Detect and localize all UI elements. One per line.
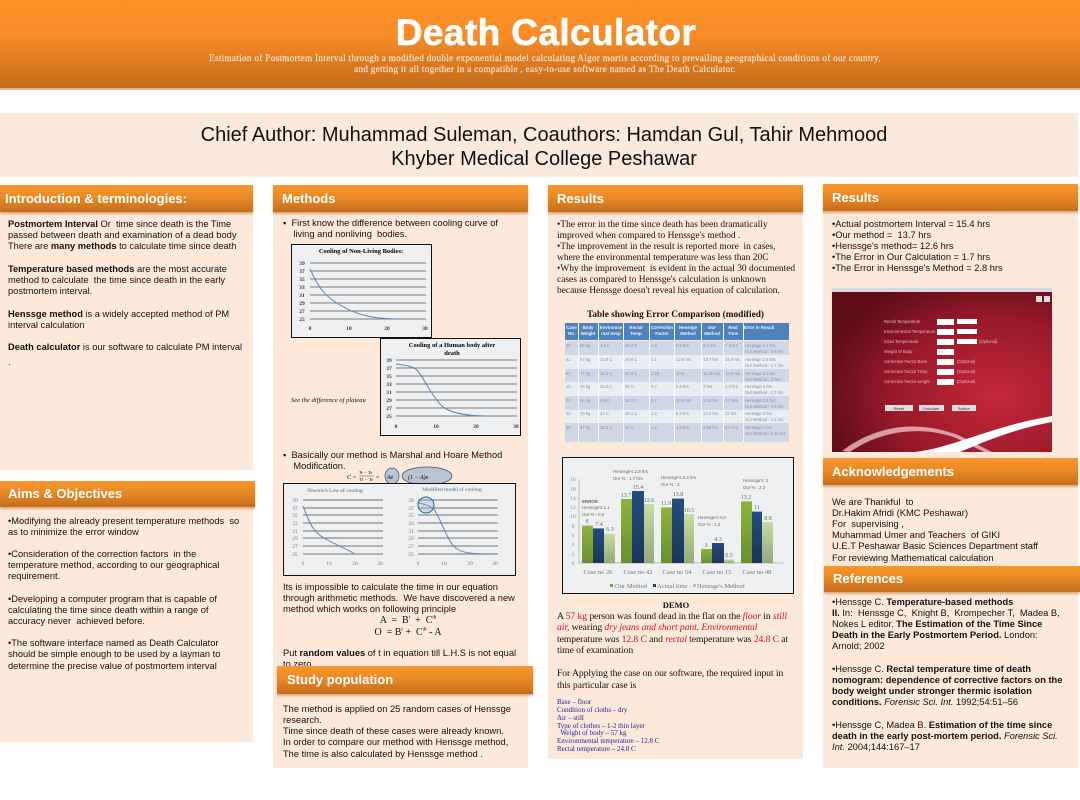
- error comparison table: 26: [566, 343, 571, 348]
- equation: [347, 466, 452, 483]
- bar chart: case comparison: 12.6: [644, 498, 654, 504]
- bar chart: case comparison: Henssge's:2.8 hrs: [613, 469, 649, 474]
- chart: cooling of a human body after death: 20: [473, 424, 479, 430]
- error comparison table: Henssge:3.3 hrs: [745, 371, 776, 376]
- bar chart: case comparison: 11.9: [661, 501, 671, 507]
- error comparison table: 15.4 hrs: [725, 357, 740, 362]
- bar chart: case comparison: 8.8: [764, 516, 772, 522]
- chart: cooling of a human body after death: [380, 338, 521, 436]
- error comparison table: 13.3 C: [600, 425, 612, 430]
- error comparison table: Factor: [655, 331, 669, 336]
- error comparison table: 54: [566, 371, 571, 376]
- bar chart: case comparison: 0: [572, 561, 575, 567]
- chart pair: Newton's law and modified model: 20: [467, 561, 473, 567]
- chart: cooling of a human body after death: 0: [395, 424, 398, 430]
- error comparison table: 7.4 hrs: [725, 343, 738, 348]
- chart: cooling of a human body after death: 33: [386, 382, 392, 388]
- chart pair: Newton's law and modified model: 20: [352, 561, 358, 567]
- chart: cooling of a human body after death: 31: [386, 390, 392, 396]
- software screenshot: (Optional): [957, 359, 976, 364]
- bar chart: case comparison: Henssge's:3.3 hrs: [661, 475, 697, 480]
- chart pair: Newton's law and modified model: 31: [408, 529, 414, 535]
- heading: results: [548, 185, 803, 212]
- error comparison table: Method: [680, 331, 696, 336]
- error comparison table: Henssge:2 hrs: [745, 411, 772, 416]
- bar chart: case comparison: Actual time: [657, 583, 688, 590]
- error comparison table: Correction: [651, 325, 673, 330]
- authors text: [201, 124, 887, 170]
- error comparison table: ntal temp: [601, 331, 621, 336]
- error comparison table: 10.5: [676, 371, 685, 376]
- heading: results: [823, 184, 1078, 211]
- software screenshot: Calculate: [923, 406, 940, 411]
- chart: cooling of non-living bodies: 25: [299, 317, 305, 323]
- error comparison table: 30.6 C: [625, 371, 637, 376]
- bar chart: case comparison: 10.5: [684, 508, 694, 514]
- chart: cooling of non-living bodies: 35: [299, 277, 305, 283]
- chart: cooling of non-living bodies: 29: [299, 301, 305, 307]
- bar chart: case comparison: Our % : 2: [661, 482, 680, 487]
- error comparison table: Case: [566, 325, 577, 330]
- error comparison table: 1.0: [651, 343, 657, 348]
- bar chart: case comparison: Case no 48: [743, 569, 771, 576]
- equation: Tr − Te: [359, 470, 372, 475]
- error comparison table: Environme: [600, 325, 623, 330]
- chart: cooling of non-living bodies: [291, 244, 432, 338]
- chart: cooling of a human body after death: 10: [433, 424, 439, 430]
- bar chart: case comparison: 16: [570, 486, 576, 492]
- error comparison table: 10.0 hrs: [676, 398, 691, 403]
- chart: cooling of a human body after death: 35: [386, 374, 392, 380]
- error comparison table: 12.6 hrs: [676, 357, 691, 362]
- bar chart: case comparison: 8: [572, 524, 575, 530]
- chart: cooling of a human body after death: 37: [386, 366, 392, 372]
- chart pair: Newton's law and modified model: 29: [292, 536, 298, 542]
- error comparison table: Henssge:1 hrs: [745, 425, 772, 430]
- chart: cooling of non-living bodies: 31: [299, 293, 305, 299]
- software screenshot: Correction Factor Base: [884, 359, 928, 364]
- bar chart: case comparison: 2: [572, 552, 575, 558]
- chart: cooling of a human body after death: 29: [386, 398, 392, 404]
- error comparison table: 1.2: [651, 411, 657, 416]
- bar chart: case comparison: 6.3: [606, 527, 614, 533]
- heading: study population: [277, 666, 533, 694]
- aims text: •Modifying the already present temperature methods so as to minimize the error window •Consideration of the correction factors in the temperature method, according to our geographical requirement. •Developing a computer program that is capable of calculating the time since death within a range of accuracy never achieved before. •The software interface named as Death Calculator should be simple enough to be used by a layman to determine the precise value of postmortem interval: [8, 516, 239, 671]
- panel: references: [823, 566, 1078, 768]
- chart: cooling of non-living bodies: 30: [422, 326, 428, 332]
- demo title: DEMO: [663, 600, 689, 610]
- chart pair: Newton's law and modified model: 27: [408, 544, 414, 550]
- chart: cooling of a human body after death: 30: [513, 424, 519, 430]
- software screenshot: (Optional): [979, 339, 998, 344]
- bar chart: case comparison: Case no 54: [663, 569, 692, 576]
- error comparison table: 11.8 C: [600, 384, 612, 389]
- bar chart: case comparison: Our % : 1.3: [698, 522, 721, 527]
- heading: aims: [0, 481, 255, 507]
- error comparison table: 22: [566, 398, 571, 403]
- bar chart: case comparison: 4: [572, 542, 575, 548]
- heading: results: Results: [557, 191, 604, 206]
- panel: results left: [548, 185, 803, 759]
- software screenshot: Weight of Body: [884, 349, 913, 354]
- chart pair: Newton's law and modified model: 0: [302, 561, 305, 567]
- chart: cooling of non-living bodies: 37: [299, 269, 305, 275]
- error comparison table: Henssge: [679, 325, 698, 330]
- software screenshot: Correction Factor TDay: [884, 369, 928, 374]
- bar chart: case comparison: Our % : 1.7 hrs: [613, 476, 643, 481]
- panel: results right: [823, 184, 1078, 458]
- heading: study population: Study population: [287, 672, 393, 687]
- chart: cooling of non-living bodies: 27: [299, 309, 305, 315]
- bar chart: case comparison: Henssge's: 2: [743, 478, 769, 483]
- demo narrative: A 57 kg person was found dead in the flat on the floor in still air, wearing dry jeans and short pant. Environmental temperature was 12.8 C and rectal temperature was 24.8 C at time of examination For Applying the case on our software, the required input in this particular case is: [557, 610, 788, 690]
- bar chart: case comparison: Henssge's Method: [697, 583, 745, 590]
- heading: introduction: Introduction & terminologies:: [5, 191, 187, 206]
- error comparison table: 15: [566, 384, 571, 389]
- authors text: Khyber Medical College Peshawar: [391, 148, 697, 170]
- heading: methods: Methods: [282, 191, 335, 206]
- panel: introduction: [0, 185, 253, 470]
- error comparison table: Error in Result: [744, 325, 775, 330]
- chart pair: Newton's law and modified model: 10: [326, 561, 332, 567]
- bar chart: case comparison: 12: [570, 505, 576, 511]
- software screenshot: (Optional): [957, 379, 976, 384]
- results list: •Actual postmortem Interval = 15.4 hrs •Our method = 13.7 hrs •Henssge's method= 12.6 hrs •The Error in Our Calculation = 1.7 hrs •The Error in Henssge's Method = 2.8 hrs: [832, 219, 1003, 273]
- demo input list: Base – floor Condition of cloths – dry Air – still Type of clothes – 1-2 thin layer Weight of body – 57 kg Environmental temperature – 12.8 C Rectal temperature – 24.8 C: [557, 698, 659, 753]
- error comparison table: 42: [566, 357, 571, 362]
- chart: cooling of non-living bodies: 39: [299, 261, 305, 267]
- error comparison table: 8.0 hrs: [703, 343, 716, 348]
- error comparison table: Our Method : 0.6 hrs: [745, 349, 783, 354]
- methods bullet two: ▪ Basically our method is Marshal and Hoare Method Modification.: [283, 450, 502, 471]
- panel: methods: [273, 185, 528, 768]
- error comparison table: 11 hrs: [725, 411, 736, 416]
- error comparison table: 15.0 C: [600, 371, 612, 376]
- software screenshot: (Optional): [957, 369, 976, 374]
- error comparison table: Body: [583, 325, 594, 330]
- error comparison table: 77 kg: [580, 371, 591, 376]
- bar chart: case comparison: Our % : 0.6: [582, 512, 605, 517]
- chart pair: Newton's law and modified model: 30: [377, 561, 383, 567]
- error comparison table: Our Method : 0.5 hrs: [745, 404, 783, 409]
- error comparison table: Our Method : 1.3 hrs: [745, 390, 783, 395]
- bar chart: case comparison: [562, 457, 794, 594]
- chart: cooling of a human body after death: death: [444, 350, 460, 357]
- error comparison table: 21 C: [600, 411, 609, 416]
- chart pair: Newton's law and modified model: 39: [408, 498, 414, 504]
- error comparison table: Henssge:2.5 hrs: [745, 398, 776, 403]
- error comparison table: 1.1: [651, 357, 657, 362]
- chart pair: Newton's law and modified model: 25: [292, 552, 298, 558]
- error comparison table: 1.25: [651, 371, 660, 376]
- chart pair: Newton's law and modified model: Modified model of cooling: [422, 486, 482, 493]
- chart pair: Newton's law and modified model: 35: [408, 513, 414, 519]
- error comparison table: 33 C: [625, 425, 634, 430]
- error comparison table: 76 kg: [580, 384, 591, 389]
- study population text: The method is applied on 25 random cases of Henssge research. Time since death of these cases were already known. In order to compare our method with Henssge method, The time is also calculated by Henssge method .: [283, 704, 511, 759]
- chart pair: Newton's law and modified model: 30: [492, 561, 498, 567]
- equation: (1 − A)e: [408, 474, 429, 481]
- chart: cooling of non-living bodies: 33: [299, 285, 305, 291]
- software screenshot: Initial Temperature: [884, 339, 919, 344]
- software screenshot: Correction Factor weight: [884, 379, 930, 384]
- error comparison table: Temp: [630, 331, 642, 336]
- bar chart: case comparison: 13.8: [673, 492, 683, 498]
- error comparison table: 67 kg: [580, 357, 591, 362]
- bar chart: case comparison: 6: [572, 533, 575, 539]
- error comparison table: Time: [728, 331, 739, 336]
- error comparison table: Henssge:4 hrs: [745, 384, 772, 389]
- heading: results: Results: [832, 190, 879, 205]
- chart pair: Newton's law and modified model: 29: [408, 536, 414, 542]
- bar chart: case comparison: Henssge's:4.0: [698, 515, 726, 520]
- authors text: Chief Author: Muhammad Suleman, Coauthors: Hamdan Gul, Tahir Mehmood: [201, 124, 887, 146]
- heading: references: References: [833, 571, 903, 586]
- chart: cooling of non-living bodies: 10: [346, 326, 352, 332]
- error comparison table: Rectal: [629, 325, 643, 330]
- bar chart: case comparison: 7.4: [595, 522, 603, 528]
- error comparison table: Method: [704, 331, 720, 336]
- bar chart: case comparison: Case no 26: [584, 569, 613, 576]
- error comparison table: 62 kg: [580, 343, 591, 348]
- bar chart: case comparison: Our Method: [615, 583, 648, 590]
- chart pair: Newton's law and modified model: 0: [417, 561, 420, 567]
- equation: =: [376, 475, 380, 481]
- chart: cooling of non-living bodies: 20: [384, 326, 390, 332]
- chart pair: Newton's law and modified model: Newton's Law of cooling: [307, 487, 363, 494]
- bar chart: case comparison: 8: [586, 519, 588, 525]
- chart pair: Newton's law and modified model: 37: [292, 506, 298, 512]
- error comparison table: Our: [708, 325, 716, 330]
- error comparison table: 36: [566, 425, 571, 430]
- bar chart: case comparison: Our % : 2.2: [743, 485, 766, 490]
- panel: aims and objectives: [0, 481, 253, 742]
- chart: cooling of a human body after death: Cooling of a Human body after: [409, 342, 495, 349]
- error comparison table: 13.8 C: [600, 357, 612, 362]
- bar chart: case comparison: Case no 15: [703, 569, 731, 576]
- bar chart: case comparison: 14: [570, 496, 576, 502]
- error comparison table: 36.2 C: [625, 398, 637, 403]
- chart: cooling of a human body after death: 25: [386, 414, 392, 420]
- introduction text: Postmortem Interval Or time since death is the Time passed between death and examination of a dead body There are many methods to calculate time since death Temperature based methods are the most accurate method to calculate the time since death in the early postmortem interval. Henssge method is a widely accepted method of PM interval calculation Death calculator is our software to calculate PM interval .: [8, 219, 242, 367]
- error comparison table: 13.2 hrs: [703, 411, 718, 416]
- chart pair: Newton's law and modified model: 10: [441, 561, 447, 567]
- error comparison table: Weight: [581, 331, 596, 336]
- equation: Ae: [386, 475, 394, 481]
- error comparison table: 8.9 C: [600, 398, 610, 403]
- panel: acknowledgements: [823, 458, 1078, 566]
- heading: acknowledgements: Acknowledgements: [832, 464, 954, 479]
- error comparison table: 1.2: [651, 425, 657, 430]
- results text: •The error in the time since death has been dramatically improved when compared to Henssge's method . •The improvement in the result is reported more in cases, where the environmental temperature was less than 20C •Why the improvement is evident in the actual 30 documented cases as compared to Henssge's calculation is unknown because Henssge doesn't reveal his equation of calculation.: [557, 220, 795, 296]
- chart pair: Newton's law and modified model: 33: [408, 521, 414, 527]
- subtitle: Estimation of Postmortem Interval through a modified double exponential model calculating Algor mortis according to prevailing geographical conditions of our country,: [209, 52, 881, 62]
- error comparison table: 6.0 hrs: [725, 425, 738, 430]
- error comparison table: Real: [728, 325, 738, 330]
- random values text: Put random values of t in equation till L.H.S is not equal to zero: [283, 648, 516, 669]
- error comparison table: [565, 323, 789, 442]
- table title: Table showing Error Comparison (modified): [587, 310, 764, 320]
- heading: acknowledgements: [823, 458, 1078, 485]
- bar chart: case comparison: Case no 42: [624, 569, 652, 576]
- error comparison table: 64 kg: [580, 398, 591, 403]
- error comparison table: 2.15 hrs: [703, 398, 718, 403]
- error comparison table: 13.7 hrs: [703, 357, 718, 362]
- error comparison table: 67 kg: [580, 425, 591, 430]
- error comparison table: 0.5 hrs: [676, 384, 689, 389]
- header banner: [0, 0, 1080, 90]
- equation: C =: [347, 475, 357, 481]
- error comparison table: No.: [568, 331, 575, 336]
- chart pair: Newton's law and modified model: 39: [292, 498, 298, 504]
- bar chart: case comparison: 15.4: [633, 485, 643, 491]
- error comparison table: 4.3 hrs: [725, 384, 738, 389]
- error comparison table: 24.8 C: [625, 357, 637, 362]
- subtitle: and getting it all together in a compatible , easy-to-use software named as The Death Calculator.: [354, 64, 736, 74]
- software screenshot: Author: [958, 406, 971, 411]
- chart pair: Newton's law and modified model: 27: [292, 544, 298, 550]
- error comparison table: 11.85 hrs: [703, 371, 720, 376]
- title: Death Calculator: [396, 12, 696, 53]
- error comparison table: Henssge:2.8 hrs: [745, 357, 776, 362]
- principle equations: A = Bt + Cdt O = Bt + Cdt - A: [374, 615, 442, 638]
- bar chart: case comparison: 18: [570, 477, 576, 483]
- bar chart: case comparison: 13.2: [741, 495, 751, 501]
- software screenshot: Reset: [894, 406, 905, 411]
- chart: cooling of a human body after death: 27: [386, 406, 392, 412]
- plateau note: See the difference of plateau: [291, 397, 366, 404]
- error comparison table: 6.5 hrs: [676, 343, 689, 348]
- chart pair: Newton's law and modified model: 25: [408, 552, 414, 558]
- references text: •Henssge C. Temperature-based methods II. In: Henssge C, Knight B, Krompecher T, Madea B, Nokes L editor. The Estimation of the Time Since Death in the Early Postmortem Period. London: Arnold; 2002 •Henssge C. Rectal temperature time of death nomogram: dependence of corrective factors on the body weight under stronger thermic isolation conditions. Forensic Sci. Int. 1992;54:51–56 •Henssge C, Madea B. Estimation of the time since death in the early post-mortem period. Forensic Sci. Int. 2004;144:167–17: [832, 596, 1062, 752]
- chart pair: Newton's law and modified model: 37: [408, 506, 414, 512]
- chart pair: Newton's law and modified model: [283, 483, 516, 576]
- error comparison table: 0.7: [651, 384, 657, 389]
- error comparison table: 13.8 hrs: [725, 371, 740, 376]
- heading: aims: Aims & Objectives: [8, 486, 122, 501]
- heading: references: [824, 566, 1080, 592]
- bar chart: case comparison: Henssge's:1.1: [582, 505, 610, 510]
- error comparison table: 4.2 C: [600, 343, 610, 348]
- bar chart: case comparison: 10: [570, 514, 576, 520]
- bar chart: case comparison: 11: [754, 505, 760, 511]
- authors panel: [0, 113, 1078, 177]
- error comparison table: Henssge:1.1 hrs: [745, 343, 776, 348]
- error comparison table: 0.7: [651, 398, 657, 403]
- bar chart: case comparison: 13.7: [621, 493, 631, 499]
- error comparison table: 35 C: [625, 384, 634, 389]
- chart: cooling of non-living bodies: Cooling of Non-Living Bodies:: [319, 248, 403, 255]
- error comparison table: Our Method : 2 hrs: [745, 377, 780, 382]
- chart pair: Newton's law and modified model: 31: [292, 529, 298, 535]
- error comparison table: 2.7 hrs: [725, 398, 738, 403]
- bar chart: case comparison: 3: [704, 543, 708, 549]
- heading: introduction: [0, 185, 253, 212]
- bar chart: case comparison: 0.5: [725, 553, 733, 559]
- chart pair: Newton's law and modified model: 35: [292, 513, 298, 519]
- bar chart: case comparison: 4.3: [714, 537, 722, 543]
- error comparison table: 33.1 C: [625, 411, 637, 416]
- equation: T1 − Te: [359, 477, 373, 482]
- chart pair: Newton's law and modified model: 33: [292, 521, 298, 527]
- panel: study population: [276, 666, 534, 759]
- arithmetic explanation: Its is impossible to calculate the time in our equation through arithmetic methods. We have discovered a new method which works on following principle: [283, 582, 515, 614]
- bar chart: case comparison: ERROR: [582, 499, 599, 504]
- error comparison table: 78 kg: [580, 411, 591, 416]
- software screenshot: [832, 288, 1052, 452]
- error comparison table: Our Method : 1.7 hrs: [745, 363, 783, 368]
- subtitle: [209, 52, 881, 74]
- error comparison table: 8.8 hrs: [676, 411, 689, 416]
- chart: cooling of non-living bodies: 0: [309, 326, 312, 332]
- software screenshot: Rectal Temperature: [884, 319, 921, 324]
- acknowledgements text: We are Thankful to Dr.Hakim Afridi (KMC Peshawar) For supervising , Muhammad Umer and Teachers of GIKI U.E.T Peshawar Basic Sciences Department staff For reviewing Mathematical calculation: [832, 496, 1038, 563]
- error comparison table: Our Method : 2.2 hrs: [745, 417, 783, 422]
- software screenshot: Environmental Temperature: [884, 329, 936, 334]
- heading: methods: [273, 185, 528, 212]
- chart: cooling of a human body after death: 39: [386, 358, 392, 364]
- methods bullet one: ▪ First know the difference between cooling curve of living and nonliving bodies.: [283, 218, 498, 239]
- error comparison table: 30.2 C: [625, 343, 637, 348]
- error comparison table: 4.8 hrs: [676, 425, 689, 430]
- error comparison table: Our Method : 1.25 hrs: [745, 431, 786, 436]
- error comparison table: 3 hrs: [703, 384, 712, 389]
- error comparison table: 48: [566, 411, 571, 416]
- error comparison table: 6.98 hrs: [703, 425, 718, 430]
